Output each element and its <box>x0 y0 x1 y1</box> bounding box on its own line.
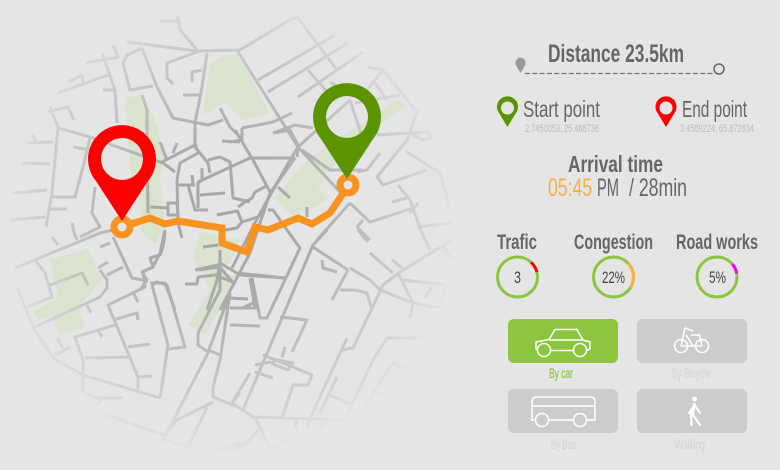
icon: car <box>536 330 590 356</box>
icon: pedestrian <box>689 397 700 425</box>
panel: circular street map <box>10 16 453 452</box>
icon: green start pin <box>313 83 381 179</box>
icon: bus <box>532 397 595 426</box>
icon: small green pin <box>497 96 518 127</box>
end of route marker ring <box>114 219 130 235</box>
option: by car <box>508 319 618 381</box>
option: by bicycle <box>637 319 747 381</box>
icon: red end pin <box>88 125 156 221</box>
icon: small red pin <box>656 96 676 127</box>
label: by bus: By Bus <box>551 436 576 452</box>
icon: bicycle <box>674 328 708 352</box>
arrival clock time: / 28min <box>629 174 687 202</box>
label: by bicycle: By Bicycle <box>672 365 711 381</box>
option: walking <box>637 389 747 452</box>
map roads <box>10 16 453 452</box>
start point legend <box>497 96 600 135</box>
stat: traffic: 3 <box>514 268 521 287</box>
start point label: Start point <box>523 96 600 122</box>
stat: congestion: 22% <box>602 268 625 287</box>
arrival clock time <box>548 174 687 202</box>
arrival clock time: PM <box>597 174 619 202</box>
stat: traffic <box>497 231 538 297</box>
heading: distance: Distance 23.5km <box>548 40 684 68</box>
stat: congestion: Congestion <box>574 231 653 254</box>
arrival clock time: 05:45 <box>548 174 592 202</box>
heading: arrival time: Arrival time <box>568 151 663 177</box>
end point label: End point <box>682 96 747 122</box>
start coordinates: 2.7450053, 25.488736 <box>525 123 599 135</box>
stat: traffic: Trafic <box>497 231 537 254</box>
label: walking: Walking <box>675 436 705 452</box>
stat: road works <box>676 231 758 297</box>
route line <box>122 186 348 252</box>
option: by bus <box>508 389 618 452</box>
stat: road works: 5% <box>709 268 726 287</box>
label: by car: By car <box>549 365 573 381</box>
stat: congestion <box>574 231 653 297</box>
start of route marker ring <box>340 177 356 193</box>
map parks <box>33 55 405 335</box>
end point legend <box>656 96 754 135</box>
distance scale graphic <box>516 58 724 74</box>
